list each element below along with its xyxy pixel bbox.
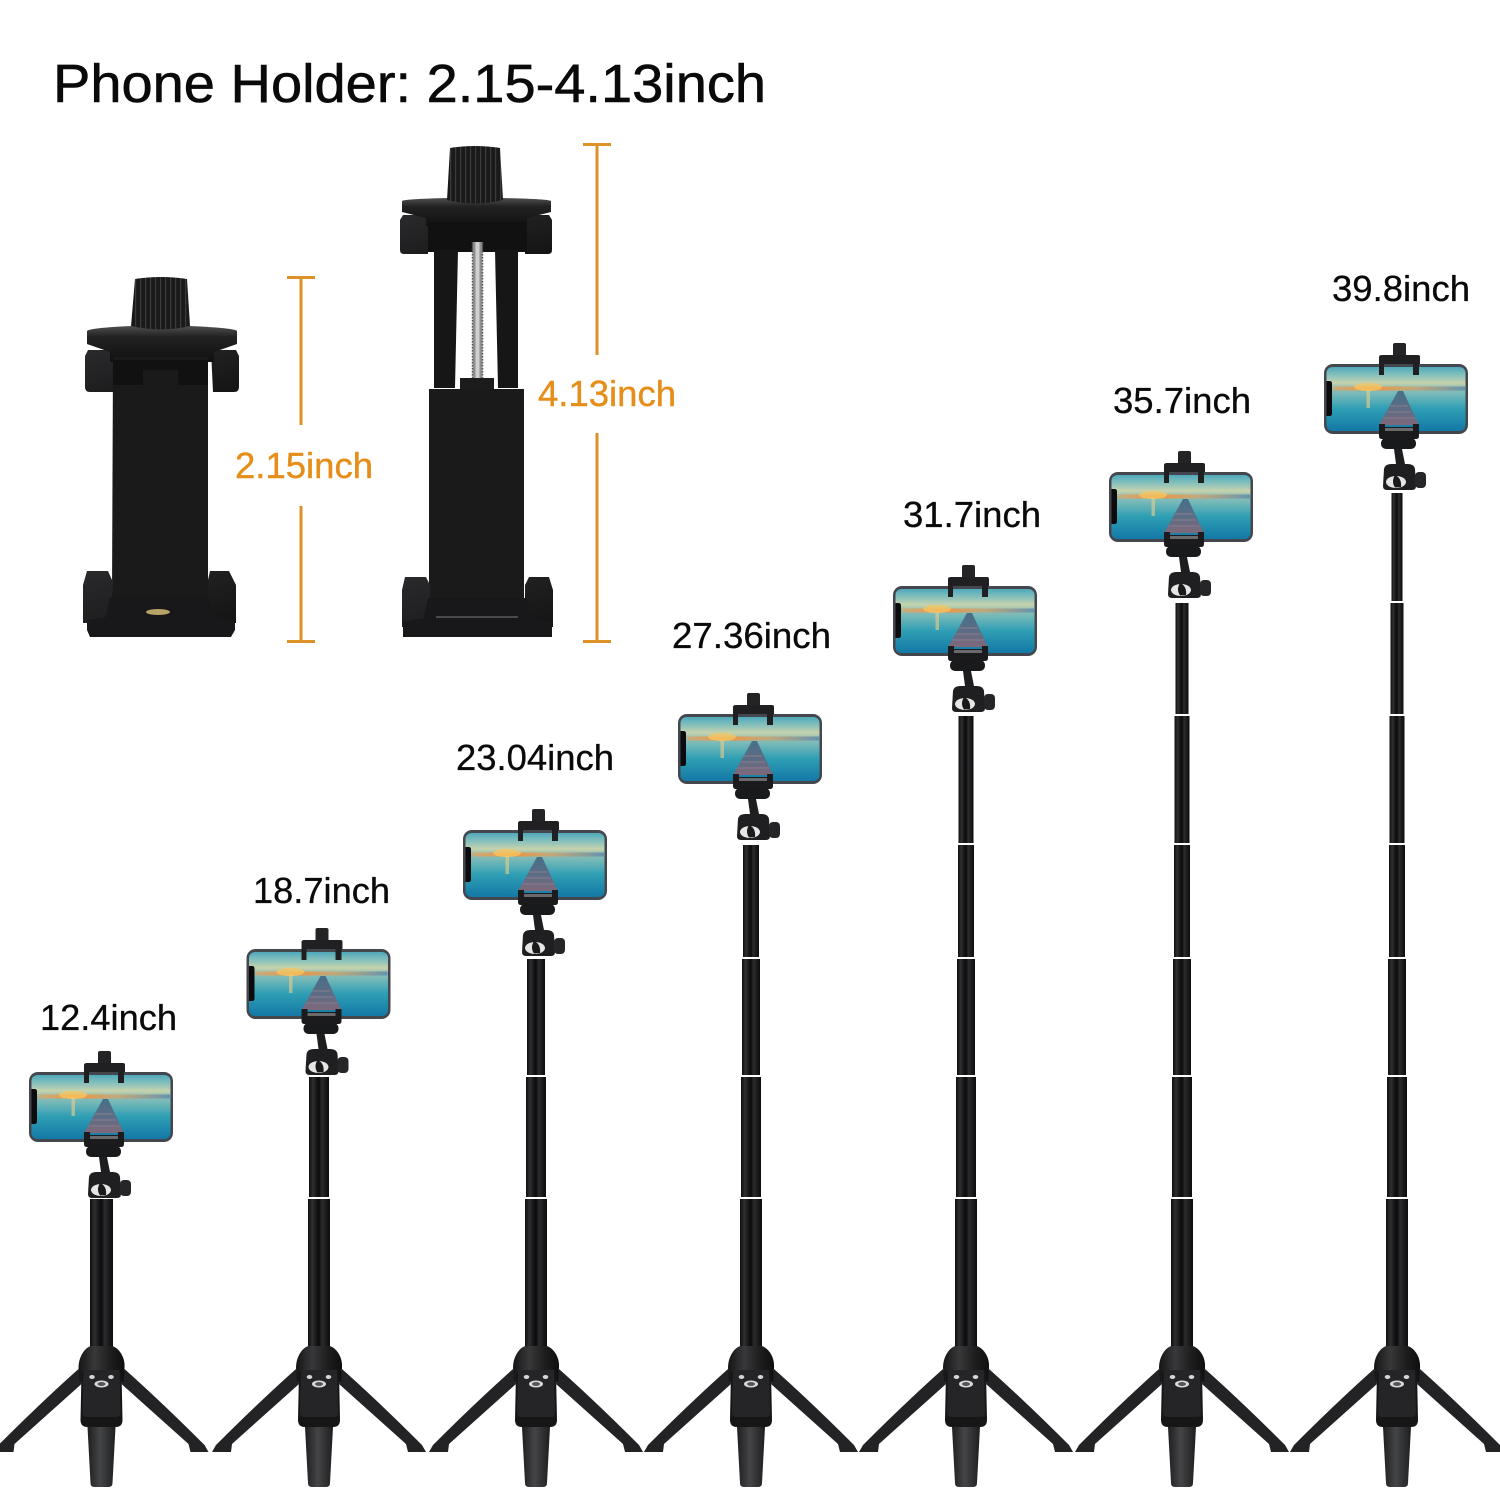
label: 2.15inch [235, 445, 373, 486]
pole [955, 716, 977, 1364]
tripod 18.7inch [212, 870, 426, 1487]
tripod 31.7inch [859, 494, 1073, 1487]
gold screw [146, 609, 170, 615]
phone and head [1324, 343, 1468, 490]
dimension: 2.15inch [235, 278, 373, 642]
phone and head [893, 565, 1037, 712]
knob [447, 146, 503, 204]
pole [308, 1077, 330, 1364]
phone and head [463, 809, 607, 956]
bottom blocks [83, 571, 236, 623]
clamp body [112, 357, 208, 597]
phone and head [678, 693, 822, 840]
base highlights [436, 616, 518, 618]
pole [1386, 493, 1408, 1364]
tripod base [1290, 1346, 1500, 1487]
base plate [87, 597, 235, 637]
height label: 23.04inch [456, 737, 614, 778]
top plate [87, 326, 237, 362]
height label: 12.4inch [40, 997, 177, 1038]
height label: 31.7inch [903, 494, 1041, 535]
base plate [403, 598, 552, 637]
rails [434, 250, 518, 388]
tripod base [1075, 1346, 1289, 1487]
tripod base [0, 1346, 208, 1487]
title: Phone Holder: 2.15-4.13inch [53, 54, 766, 114]
tripod 12.4inch [0, 997, 208, 1487]
height label: 18.7inch [253, 870, 390, 911]
closed phone holder [83, 277, 239, 637]
bracket [287, 278, 315, 642]
label: 4.13inch [538, 373, 676, 414]
screw cap [460, 378, 494, 390]
pole [740, 845, 762, 1364]
tripod base [429, 1346, 643, 1487]
screw [472, 242, 482, 379]
crossbar [428, 222, 527, 252]
phone and head [29, 1051, 173, 1198]
tripod base [644, 1346, 858, 1487]
tripod base [859, 1346, 1073, 1487]
phone and head [1109, 451, 1253, 598]
dimension: 4.13inch [538, 144, 676, 642]
tripod 35.7inch [1075, 380, 1289, 1487]
bracket [583, 144, 611, 642]
pole [1171, 603, 1193, 1364]
top plate [402, 198, 551, 226]
pole [90, 1199, 113, 1364]
side blocks [85, 350, 239, 392]
pole [525, 959, 547, 1364]
height label: 27.36inch [672, 615, 831, 656]
knob [131, 277, 190, 330]
tripod 23.04inch [429, 737, 643, 1487]
extended phone holder [400, 146, 553, 637]
clamp body [429, 389, 524, 598]
tripod 39.8inch [1290, 268, 1500, 1487]
tripod base [212, 1346, 426, 1487]
height label: 35.7inch [1113, 380, 1251, 421]
height label: 39.8inch [1332, 268, 1470, 309]
bottom blocks [402, 577, 553, 627]
side blocks [400, 215, 552, 254]
phone and head [246, 928, 390, 1075]
tripod 27.36inch [644, 615, 858, 1487]
